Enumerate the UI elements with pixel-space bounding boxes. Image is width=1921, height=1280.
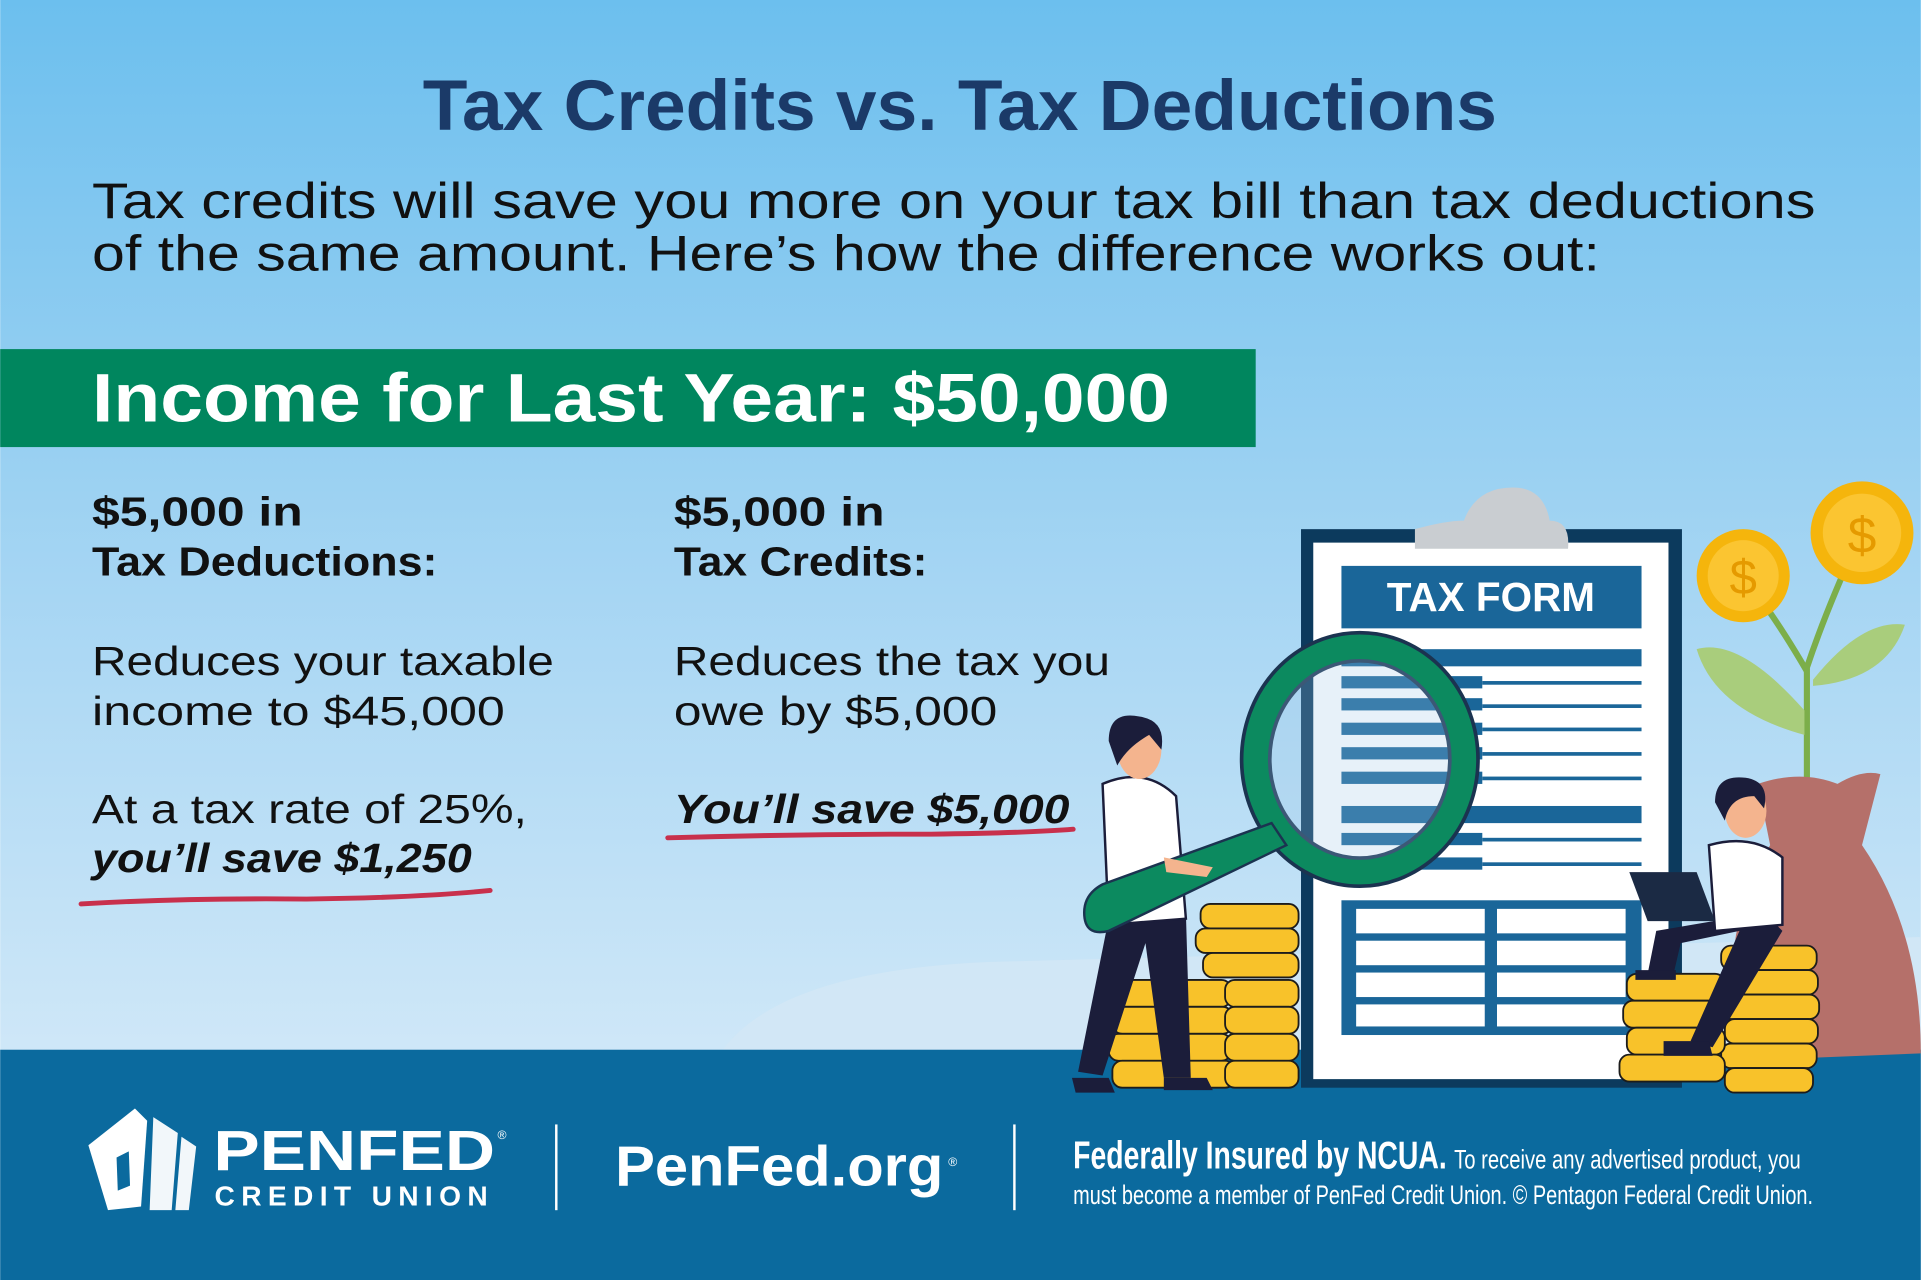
column: credits: You’ll save $5,000 [674, 786, 1070, 832]
column: credits: Reduces the tax you [674, 638, 1110, 684]
column: deductions: Reduces your taxable [92, 638, 554, 684]
column: deductions: Tax Deductions: [92, 539, 437, 585]
column: credits: owe by $5,000 [674, 688, 997, 734]
illustration: clipboard tax form [1301, 488, 1682, 1088]
title: Tax Credits vs. Tax Deductions [423, 67, 1497, 146]
footer: ® [497, 1128, 507, 1142]
subtitle: Tax credits will save you more on your tax bill than tax deductions [92, 173, 1815, 229]
illustration: man with magnifier [1072, 647, 1464, 1093]
column: deductions: income to $45,000 [92, 688, 505, 734]
illustration: plant with coins: $ [1848, 505, 1876, 563]
logo text: PENFED [213, 1119, 495, 1182]
underline: credits [668, 829, 1073, 838]
column: deductions [81, 488, 554, 904]
banner: income: Income for Last Year: $50,000 [92, 359, 1170, 436]
underline: deductions [81, 890, 490, 904]
footer [0, 1050, 1921, 1280]
footer: ® [948, 1155, 957, 1169]
column: credits: Tax Credits: [674, 539, 927, 585]
disclaimer [1073, 1135, 1813, 1210]
logo mark [88, 1109, 196, 1210]
disclaimer: To receive any advertised product, you [1454, 1145, 1801, 1175]
illustration: plant with coins: $ [1730, 551, 1757, 605]
subtitle [92, 173, 1815, 282]
subtitle: of the same amount. Here’s how the difference works out: [92, 226, 1600, 282]
column: deductions: you’ll save $1,250 [90, 835, 472, 881]
illustration: money bag [1732, 773, 1921, 1061]
column: deductions: $5,000 in [92, 488, 303, 534]
illustration: man with laptop [1629, 777, 1782, 1056]
disclaimer: Federally Insured by NCUA. [1073, 1135, 1447, 1178]
illustration: plant with coins [1697, 481, 1913, 784]
banner: income [0, 349, 1256, 447]
illustration: coin stacks [1109, 904, 1819, 1093]
illustration: clipboard tax form: TAX FORM [1387, 574, 1595, 620]
footer: CREDIT UNION [215, 1179, 488, 1211]
website: PenFed.org [615, 1135, 943, 1198]
column: deductions: At a tax rate of 25%, [92, 786, 527, 832]
column: credits: $5,000 in [674, 488, 885, 534]
column: credits [668, 488, 1110, 838]
